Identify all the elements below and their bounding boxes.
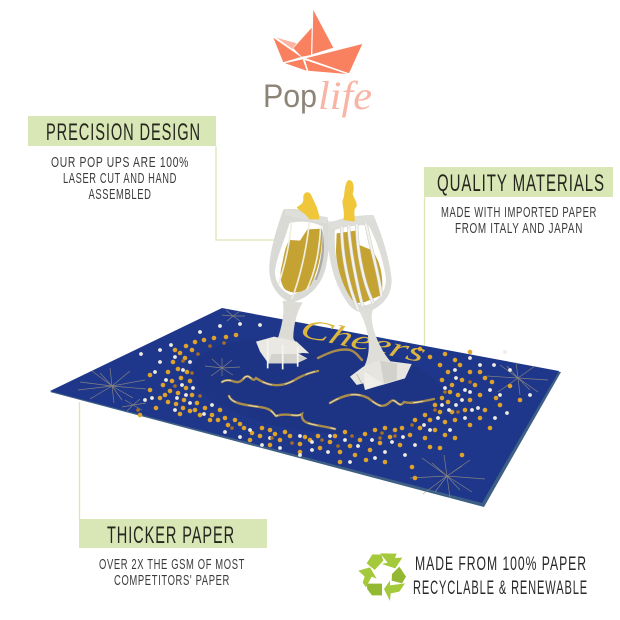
confetti: amber xyxy=(138,343,470,446)
champagne glasses pop-up xyxy=(256,180,412,390)
panel: quality materials xyxy=(424,167,613,237)
greeting text: Cheers xyxy=(295,314,431,369)
left liquid xyxy=(280,229,322,292)
confetti: gold xyxy=(140,335,520,478)
heading bar xyxy=(424,167,613,197)
heading bar xyxy=(28,116,216,146)
panel: precision design xyxy=(28,116,216,203)
body text: OUR POP UPS ARE 100% xyxy=(51,154,189,171)
heading bar xyxy=(79,519,267,548)
body text xyxy=(51,154,189,203)
card face xyxy=(50,308,559,503)
body text: LASER CUT AND HAND xyxy=(63,170,177,187)
body text: COMPETITORS' PAPER xyxy=(114,572,230,589)
body text xyxy=(99,556,245,589)
right glass bowl xyxy=(328,215,392,312)
recycling statement xyxy=(413,554,588,599)
panel: thicker paper xyxy=(79,519,267,589)
body text: OVER 2X THE GSM OF MOST xyxy=(99,556,245,573)
left stem xyxy=(273,301,303,355)
gold ribbons xyxy=(222,349,434,429)
right liquid xyxy=(336,231,382,303)
icon: origami boat xyxy=(273,10,362,74)
inner circle xyxy=(185,325,451,447)
icon: recycle xyxy=(358,553,406,601)
left foot xyxy=(256,337,309,369)
heading: THICKER PAPER xyxy=(107,522,235,549)
right stem xyxy=(358,309,391,373)
body text: ASSEMBLED xyxy=(88,186,152,203)
pop-up card base xyxy=(50,308,561,507)
connector lines xyxy=(80,146,424,519)
logo wordmark: life: life xyxy=(318,73,372,118)
left flame xyxy=(297,192,319,219)
card edge xyxy=(50,309,561,507)
logo wordmark: Pop: Pop xyxy=(263,78,317,114)
confetti: white xyxy=(141,324,530,462)
fireworks xyxy=(78,310,548,498)
right foot xyxy=(350,360,412,390)
body text xyxy=(441,204,597,237)
left glass bowl xyxy=(269,209,330,303)
logo: Poplife xyxy=(263,10,372,118)
right flame xyxy=(342,180,357,222)
heading: PRECISION DESIGN xyxy=(46,119,201,146)
